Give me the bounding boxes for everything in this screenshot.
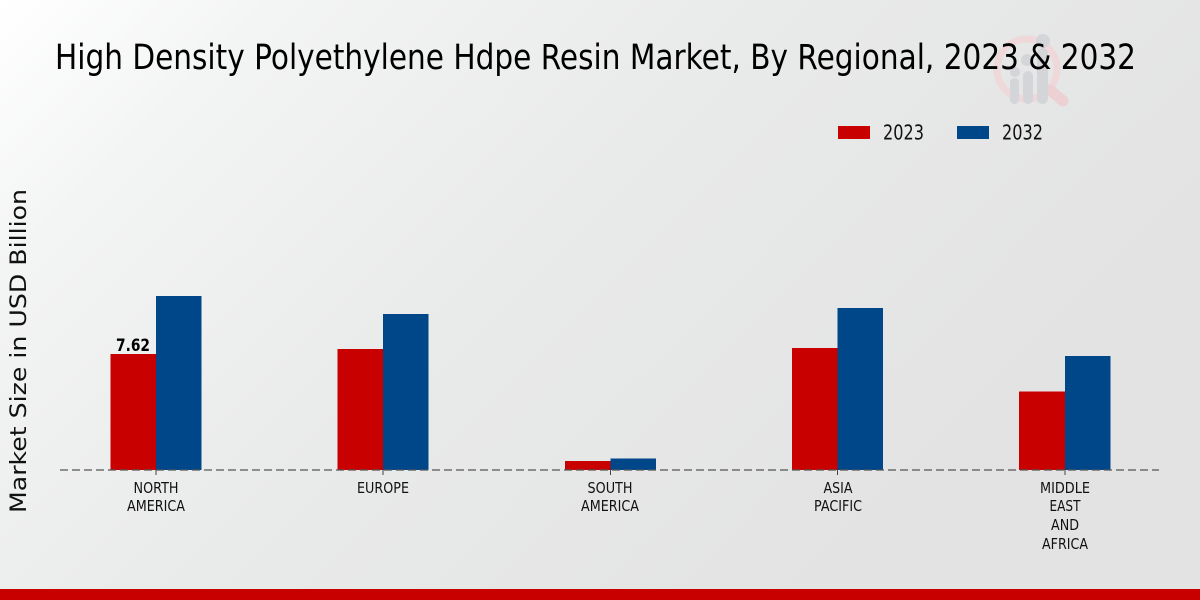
axis label: Middle East and Africa: EAST bbox=[1050, 497, 1081, 515]
legend: 2032 bbox=[1002, 120, 1043, 144]
bars: South America bbox=[565, 458, 656, 470]
axis label: Asia Pacific: ASIA bbox=[824, 479, 853, 497]
bars: Middle East and Africa bbox=[1019, 356, 1110, 470]
axis label: Asia Pacific bbox=[814, 479, 862, 515]
axis label: South America: AMERICA bbox=[581, 497, 639, 515]
axis label: Middle East and Africa: AFRICA bbox=[1042, 535, 1088, 553]
axis label: Middle East and Africa: MIDDLE bbox=[1040, 479, 1090, 497]
axis label: North America bbox=[127, 479, 185, 515]
legend bbox=[838, 120, 1043, 144]
legend: 2023 bbox=[883, 120, 924, 144]
watermark logo bbox=[997, 34, 1063, 104]
bars: Europe bbox=[338, 314, 428, 470]
bars: Asia Pacific bbox=[792, 308, 883, 470]
y axis label: Market Size in USD Billion bbox=[6, 189, 32, 513]
axis label: North America: NORTH bbox=[134, 479, 178, 497]
axis label: South America bbox=[581, 479, 639, 515]
axis label: Middle East and Africa bbox=[1040, 479, 1090, 553]
axis label: North America: AMERICA bbox=[127, 497, 185, 515]
axis label: Middle East and Africa: AND bbox=[1051, 516, 1079, 534]
bars: North America bbox=[110, 296, 202, 470]
axis label: Europe: EUROPE bbox=[357, 479, 409, 497]
axis label: South America: SOUTH bbox=[588, 479, 632, 497]
data label: 7.62 bbox=[116, 336, 150, 355]
baseline bbox=[60, 469, 1159, 471]
bottom bar bbox=[0, 589, 1200, 600]
axis label: Asia Pacific: PACIFIC bbox=[814, 497, 862, 515]
